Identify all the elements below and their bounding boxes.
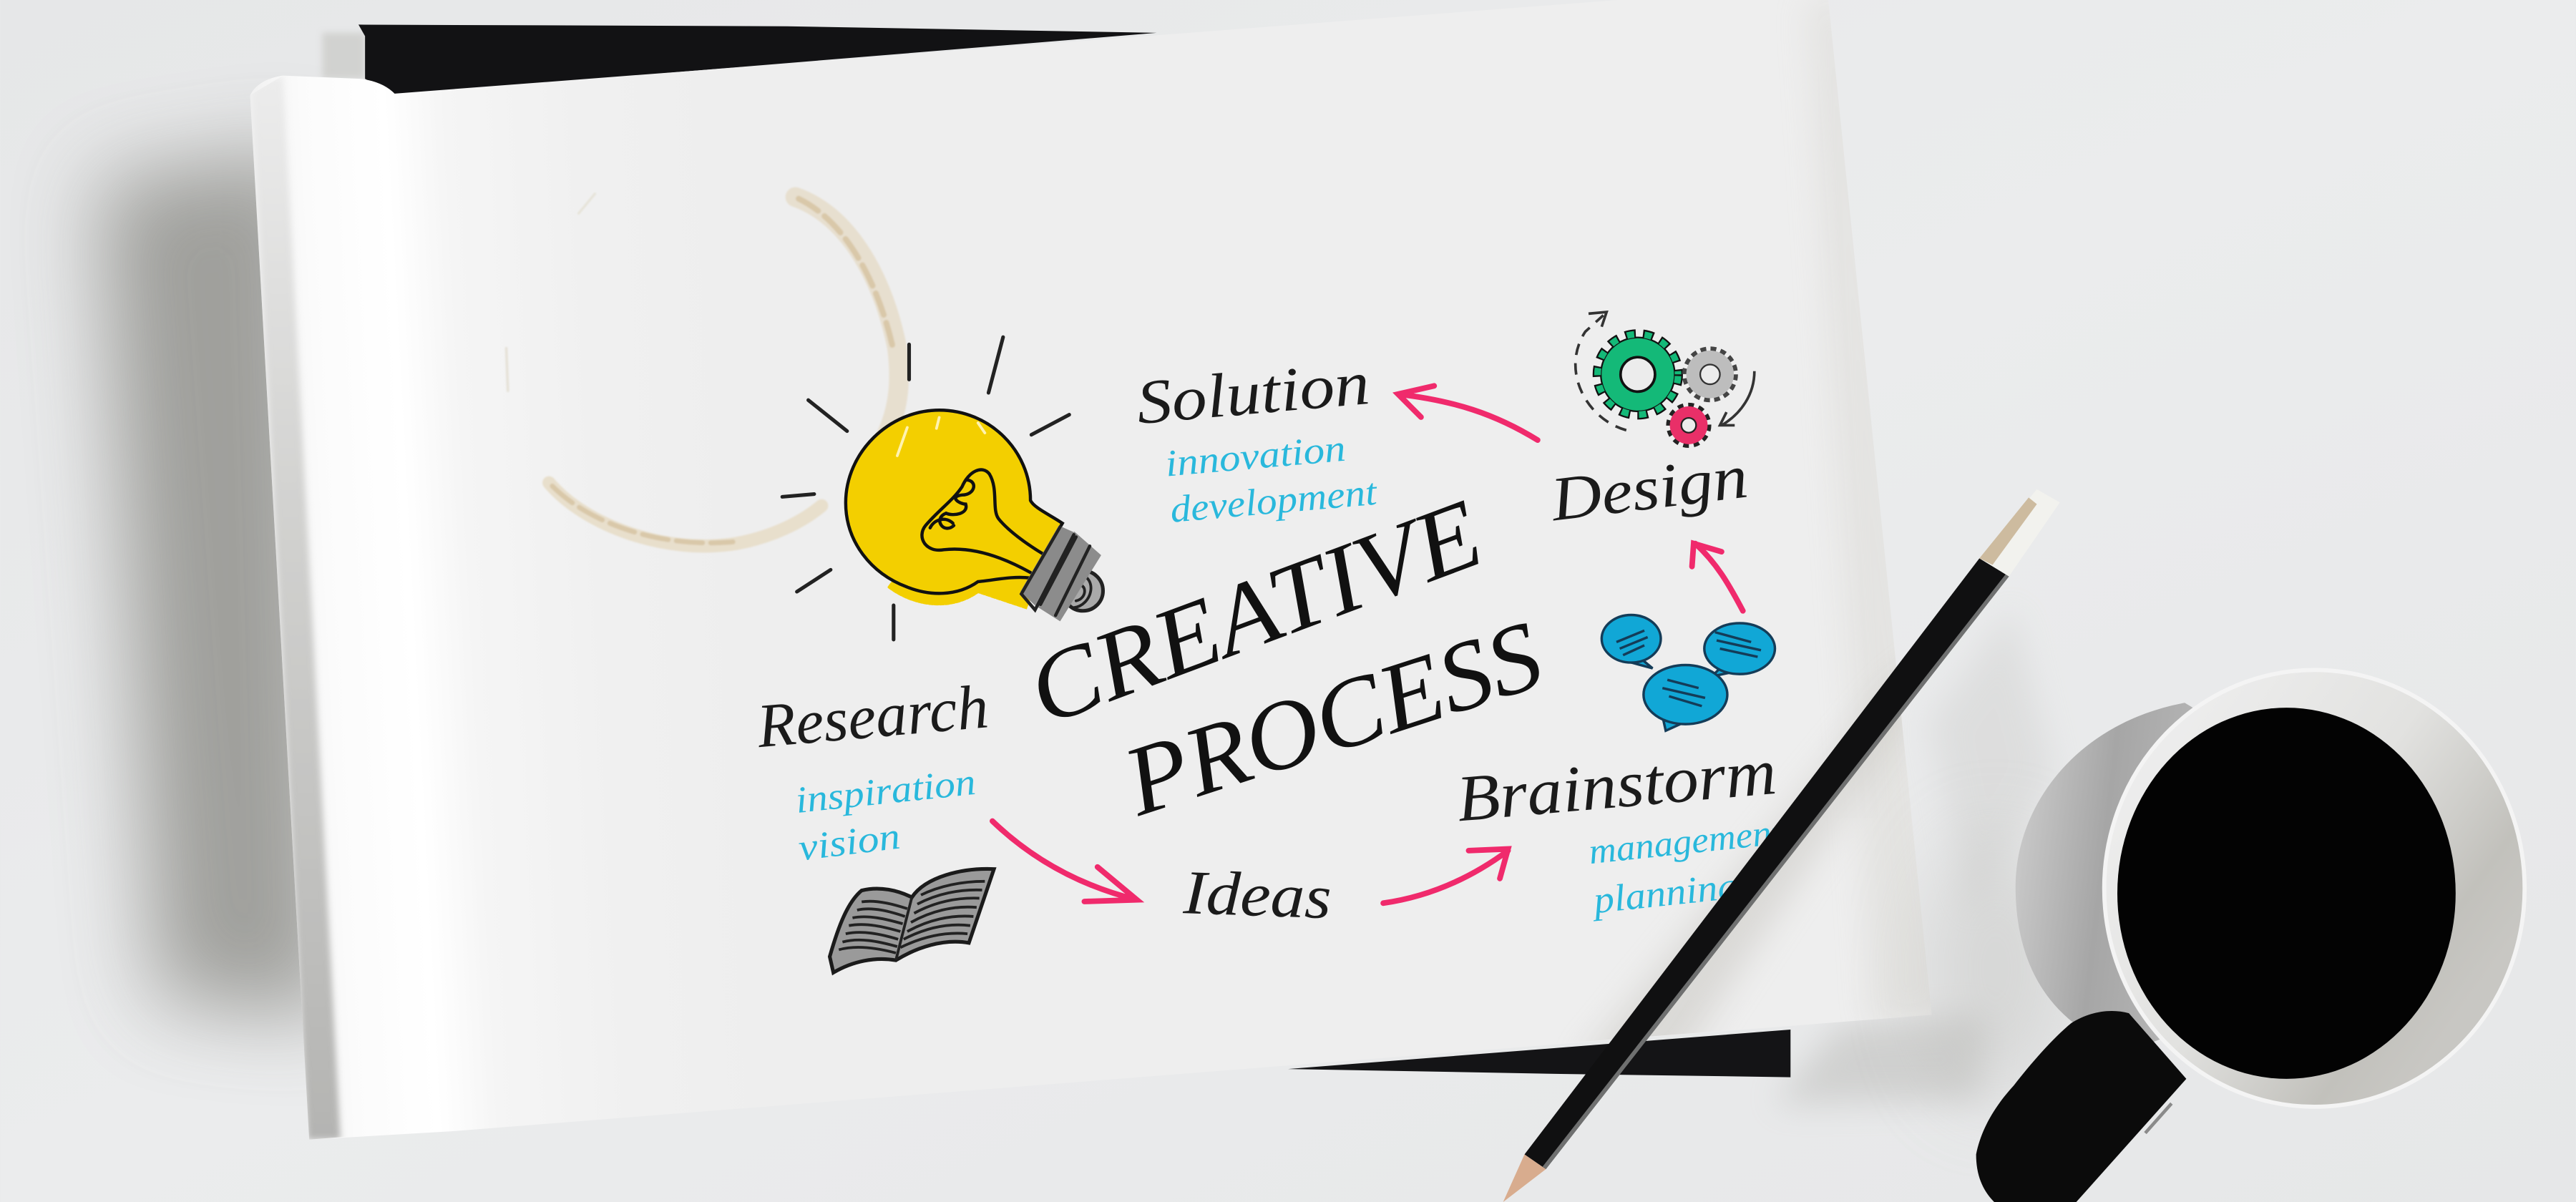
icon: light bulb <box>782 337 1103 640</box>
icon: open book <box>830 869 994 972</box>
step: brainstorm: planning <box>1589 865 1740 922</box>
heading: creative process <box>1014 478 1554 837</box>
bulb glass <box>846 410 1063 593</box>
page shading <box>1590 10 1931 1041</box>
step: design: Design <box>1546 441 1751 534</box>
filament <box>922 469 1045 572</box>
bulb rays <box>782 337 1069 640</box>
icon: speech bubbles <box>1601 615 1775 731</box>
cup body <box>2016 703 2218 1051</box>
cup handle <box>1976 1011 2186 1202</box>
cup shadow <box>1930 837 2062 1100</box>
step: research <box>753 671 991 869</box>
yellow colour offset <box>889 514 1044 607</box>
notebook page <box>250 0 1963 1140</box>
bulb glints <box>897 417 985 456</box>
coffee stain ring <box>507 194 899 546</box>
step: research: vision <box>796 816 902 869</box>
heading: creative process: CREATIVE <box>1014 478 1496 746</box>
step: brainstorm: management <box>1587 811 1785 871</box>
step: solution <box>1133 348 1380 531</box>
pencil and page shadow on desk <box>1774 607 2054 1103</box>
step: research: Research <box>753 671 991 761</box>
heading: creative process: PROCESS <box>1111 600 1554 837</box>
cycle arrows <box>1576 312 1755 430</box>
icon: coffee cup <box>1976 670 2524 1202</box>
green gear <box>1598 334 1678 415</box>
grey gear <box>1684 349 1735 400</box>
coffee <box>2117 708 2456 1079</box>
step: ideas: Ideas <box>1181 857 1332 932</box>
arrow: ideas to brainstorm <box>1383 849 1508 903</box>
arrow: research to ideas <box>992 821 1137 902</box>
bulb screw base <box>1020 526 1103 621</box>
arrow: design to solution <box>1398 386 1538 440</box>
step: solution: Solution <box>1133 348 1372 437</box>
step: brainstorm <box>1454 735 1785 922</box>
step: research: inspiration <box>794 761 977 821</box>
pink gear <box>1668 405 1709 446</box>
step: solution: development <box>1169 471 1380 531</box>
arrow: bubbles to design <box>1692 544 1743 611</box>
notebook shadow <box>99 33 365 1018</box>
cup rim <box>2104 670 2524 1107</box>
page curl edge <box>252 77 341 1140</box>
icon: gears <box>1576 312 1755 446</box>
step: solution: innovation <box>1163 428 1347 485</box>
black board behind notebook <box>358 24 1790 1078</box>
step: brainstorm: Brainstorm <box>1454 735 1779 835</box>
icon: pencil <box>1503 489 2060 1202</box>
